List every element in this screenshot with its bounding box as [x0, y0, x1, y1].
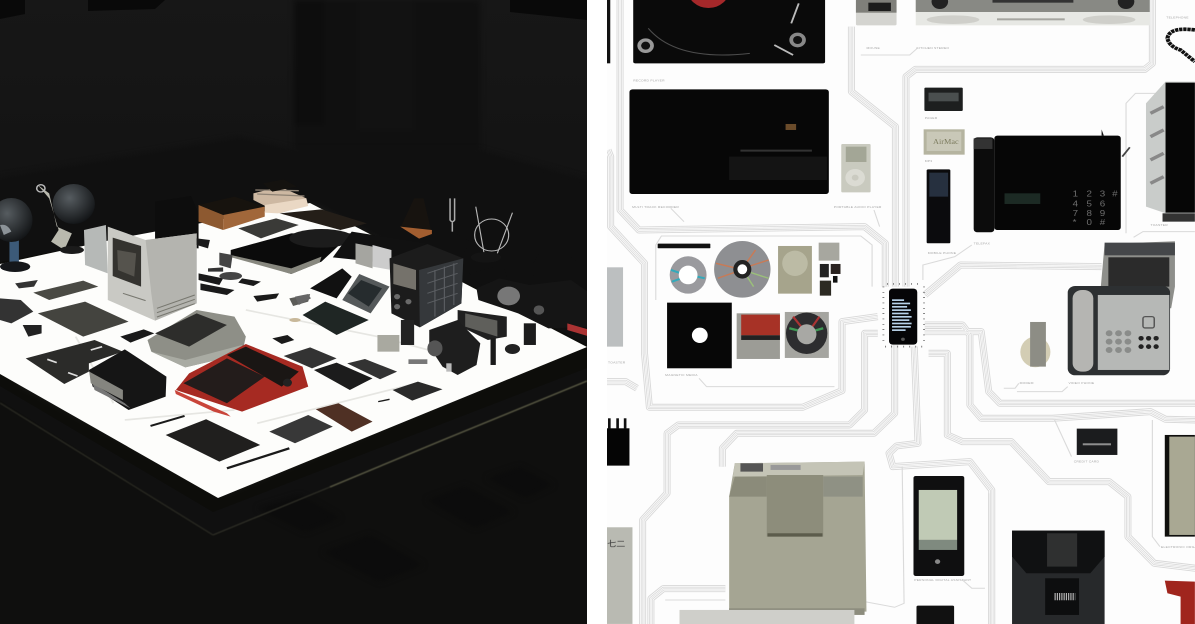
- device: wireless card: [924, 129, 965, 155]
- videophone: [303, 268, 390, 335]
- desk videophone: [1068, 241, 1175, 375]
- flat tablets left: [0, 280, 129, 337]
- icon: black telephone right: [529, 253, 590, 285]
- gallery floor: [0, 200, 587, 535]
- dark device with silver panel: [332, 232, 406, 270]
- icon: metronome: [400, 226, 432, 239]
- device: fax telephone: 123#: [1073, 189, 1118, 199]
- flat tablets front right: [269, 359, 442, 443]
- document bottom left: 七二: [607, 539, 626, 548]
- memory bar: [658, 244, 710, 248]
- floor caption patches: [257, 467, 553, 582]
- small grey device: [84, 225, 108, 273]
- turntable: [231, 229, 354, 274]
- document bottom left: [607, 527, 632, 624]
- compact disc: [714, 241, 771, 298]
- black power adapter: [607, 418, 629, 466]
- flat dark items back: [238, 209, 367, 238]
- small labels: RECORD PLAYER: [633, 79, 665, 82]
- small black device bottom: [916, 606, 954, 624]
- movie camera grip: [458, 310, 507, 340]
- small labels: PERSONAL DIGITAL ASSISTANT: [914, 578, 971, 582]
- floor glow lines: [0, 381, 587, 535]
- small labels: TOASTER: [608, 360, 626, 364]
- device: fax telephone: *0#: [1073, 217, 1106, 227]
- film and small items: [289, 294, 427, 364]
- floor lower shade: [0, 381, 587, 624]
- icon: globe right: [37, 184, 95, 254]
- printer or calculator: [147, 310, 246, 367]
- grey box left: [607, 267, 623, 347]
- small labels: MAGNETIC MEDIA: [665, 373, 698, 377]
- table glow: [20, 208, 565, 490]
- device: portable audio player: [841, 144, 871, 192]
- icon: globe left: [0, 198, 33, 272]
- cameras right: [476, 286, 587, 345]
- icon: desktop computer: [108, 227, 197, 321]
- magneto optical disc: [785, 312, 829, 358]
- small labels: MODEM: [1020, 381, 1034, 385]
- wall recess: [296, 2, 324, 122]
- poster background: [607, 0, 1195, 624]
- thin single traces: [607, 48, 1195, 624]
- memory cards: [819, 243, 841, 296]
- icon: antenna: [471, 207, 512, 263]
- objects on table: [0, 179, 590, 468]
- connector pins around phone: [883, 284, 924, 347]
- circuit trace bundles: [607, 0, 1195, 624]
- microphone cylinder: [1020, 322, 1050, 367]
- device: fax telephone: [974, 129, 1130, 232]
- camera with grip lower: [401, 320, 520, 375]
- device: fax telephone: 456: [1073, 199, 1105, 209]
- table frame: [0, 202, 587, 512]
- credit card: [1077, 429, 1117, 455]
- small labels: VIDEO PHONE: [1068, 381, 1094, 385]
- small labels: KITCHEN STEREO: [916, 46, 950, 50]
- device: pager: [924, 88, 963, 111]
- large beige computer: [729, 462, 866, 615]
- personal digital assistant: [913, 476, 964, 576]
- black block behind computer: [155, 224, 199, 248]
- wall shelves: [0, 0, 587, 20]
- small labels: [608, 16, 1195, 582]
- illuminated table top: [0, 203, 587, 498]
- flat black case with slots: [26, 340, 123, 384]
- beige panel right: [1165, 435, 1195, 537]
- device: wireless card: AirMac: [933, 137, 959, 146]
- device: compact camera top: [856, 0, 897, 25]
- panel: white circuit poster: [605, 0, 1195, 624]
- device: radio: [916, 0, 1150, 25]
- floppy disk: [667, 303, 732, 368]
- small labels: TELEPHONE: [1166, 16, 1189, 20]
- icon: tuning fork: [450, 198, 455, 232]
- small labels: MOBILE PHONE: [928, 251, 956, 255]
- black printer: [1012, 531, 1105, 624]
- small labels: MOUSE: [866, 46, 880, 50]
- small black items: [120, 329, 337, 368]
- small parts centre: [197, 238, 310, 306]
- device: fax telephone: 789: [1073, 208, 1105, 218]
- red floppy: [737, 313, 780, 359]
- small labels: PAGER: [925, 116, 938, 120]
- small labels: TOASTER: [1150, 223, 1168, 227]
- book stack: [253, 189, 308, 214]
- faint table traces: [76, 310, 454, 423]
- small labels: PORTABLE AUDIO PLAYER: [834, 205, 882, 209]
- base below computer: [679, 610, 854, 624]
- small silver camera: [377, 335, 399, 352]
- telephone cord: [1167, 29, 1195, 62]
- small labels: MULTI TRACK RECORDER: [632, 205, 680, 209]
- device: mobile phone: [927, 169, 950, 243]
- red device bottom right: [1165, 581, 1195, 624]
- hard drive: [778, 246, 812, 294]
- red typewriter: [175, 344, 308, 417]
- gallery wall: [0, 0, 587, 200]
- small labels: CREDIT CARD: [1074, 460, 1100, 464]
- central smartphone: [889, 289, 917, 345]
- brown box: [198, 205, 265, 230]
- black typewriter: [89, 349, 166, 410]
- stylus items: [151, 399, 390, 468]
- small labels: MP3: [925, 159, 932, 163]
- small dark devices: [431, 233, 507, 285]
- small labels: TELEFAX: [974, 241, 991, 245]
- corner item top left: [605, 0, 610, 63]
- device: record player: [633, 0, 825, 63]
- mini disc: [670, 256, 707, 294]
- icon: portable tv camera: [390, 244, 463, 327]
- large tablet front: [166, 419, 260, 462]
- device: air conditioner: [1146, 82, 1195, 222]
- device: multi track recorder: [629, 89, 829, 194]
- panel: photo of illuminated exhibition table: [0, 0, 610, 624]
